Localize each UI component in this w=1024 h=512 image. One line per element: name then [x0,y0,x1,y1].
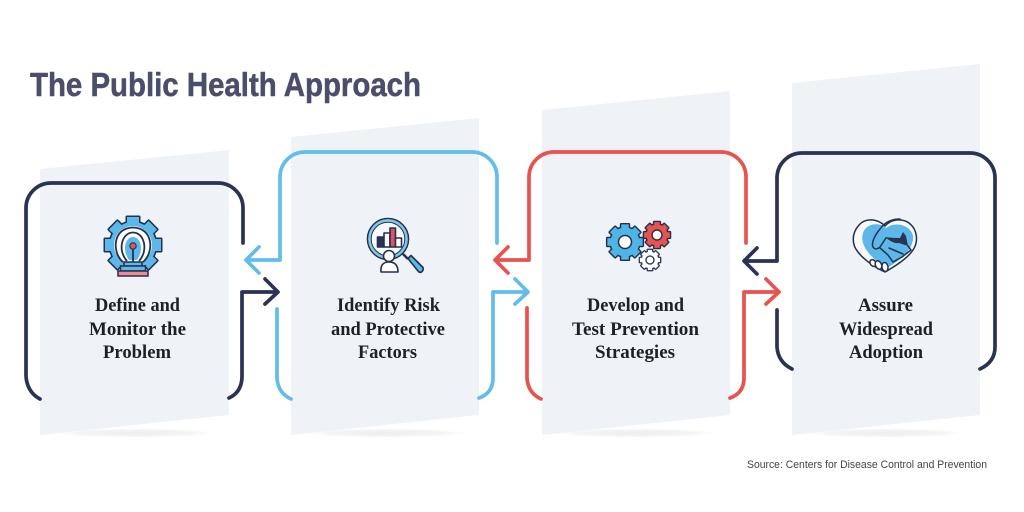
arrow: blue right [479,279,528,398]
frame 4 with left arrow [744,153,995,369]
label 3: Develop and [587,296,685,316]
label 4: Widespread [839,320,934,340]
shadow: card 1 [45,428,225,438]
label 2: and Protective [331,320,445,340]
label 2: Factors [358,343,417,363]
icon: magnifier with chart and person [368,218,423,272]
frame 3 lower left [527,308,541,399]
label 3: Strategies [595,343,675,363]
shadow: card 4 [795,428,975,438]
shadow: card 2 [295,428,475,438]
label 4: Assure [858,296,913,316]
gear: white [640,250,660,270]
card 4 [792,64,980,435]
card 1 [40,150,229,435]
step 1: define and monitor [26,150,278,438]
gear: blue [607,224,643,260]
label 1: Define and [95,296,181,316]
shadow: card 3 [545,428,725,438]
arrow: navy right [229,279,278,398]
frame 2 lower left [277,309,291,399]
arrow: red right [730,279,779,398]
icon: three gears [607,222,670,270]
label 1: Monitor the [89,320,186,340]
source note: Source: Centers for Disease Control and Prevention [747,459,987,471]
label 4: Adoption [849,343,924,363]
frame 3 with left arrow [495,152,746,273]
label 1: Problem [103,343,172,363]
step 2: identify risk [246,118,528,438]
frame 2 with left arrow [246,152,497,273]
icon: gear with light bulb [105,217,161,276]
frame 4 lower left [777,310,792,369]
label 2: Identify Risk [337,296,441,316]
step 4: assure adoption [744,64,995,438]
icon: handshake heart [853,219,916,272]
card 3 [542,91,730,435]
title: The Public Health Approach [30,66,421,103]
card 2 [291,118,479,435]
label 3: Test Prevention [572,320,700,340]
frame 1 [26,183,243,399]
step 3: develop and test [495,91,779,438]
gear: red [644,222,670,248]
